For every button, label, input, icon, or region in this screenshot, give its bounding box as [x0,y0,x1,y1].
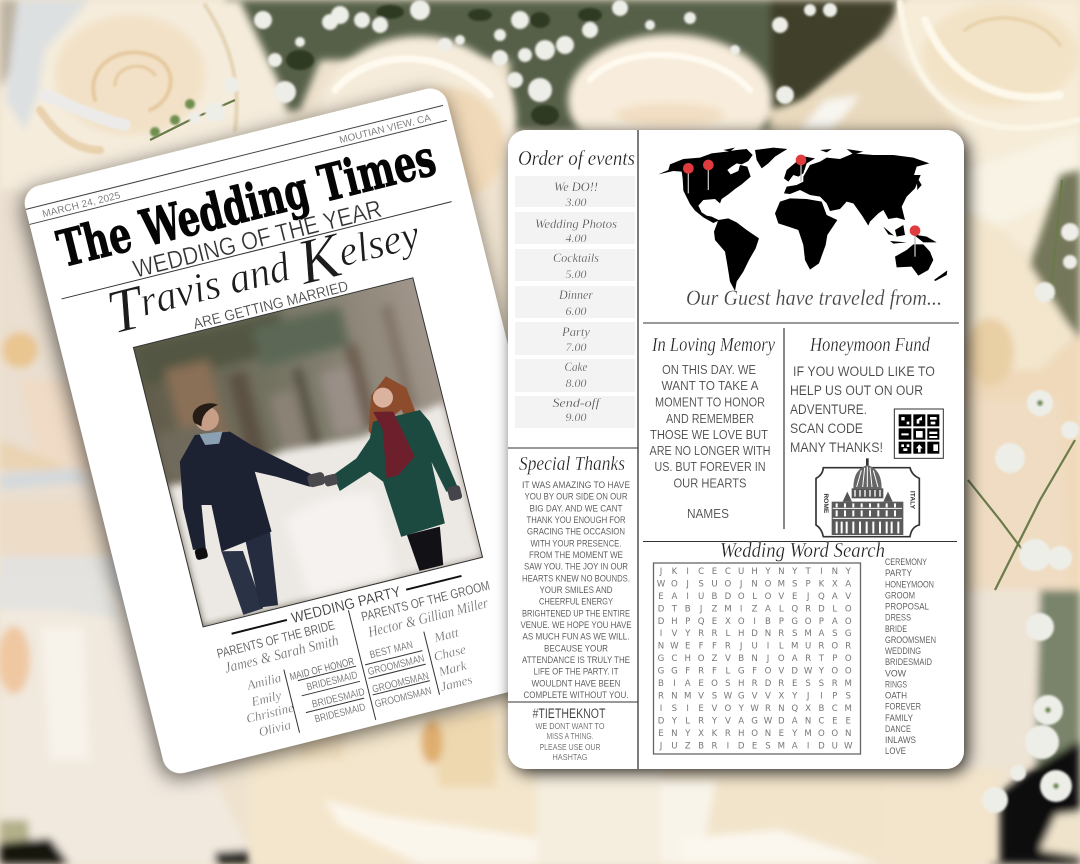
word search grid: BIAEOSHRDRESSRM [658,679,852,689]
panel: special thanks: CHEERFUL ENERGY [539,596,614,607]
panel: world map [658,148,947,310]
panel: special thanks: ATTENDANCE IS TRULY THE [522,654,630,665]
word list: GROOM [885,590,915,601]
icon: Rome postage stamp [816,458,919,537]
groom's side: GROOMSMAN [367,653,426,678]
groom's side: PARENTS OF THE GROOM [360,578,491,624]
panel: in loving memory: OUR HEARTS [674,476,746,490]
word list: HONEYMOON [885,579,934,590]
word list: CEREMONY [885,557,927,568]
bottom center roses [250,695,1000,864]
word list: OATH [885,691,907,702]
panel: special thanks: FROM THE MOMENT WE [529,549,623,560]
man [180,403,325,615]
masthead title: The Wedding Times [52,128,441,279]
word search grid: EAIUBDOLOVEJQAV [658,592,851,602]
panel: special thanks: THANK YOU ENOUGH FOR [526,514,626,525]
word search grid: JUZBRIDESMAIDUW [659,741,853,751]
headline: wedding of the year: WEDDING OF THE YEAR [130,195,385,284]
word search grid: DHPQEXOIBPGOPAO [658,617,852,627]
panel: order of events: 7.00 [566,340,586,354]
panel: honeymoon fund: MANY THANKS! [790,440,883,455]
word list: PROPOSAL [885,602,929,612]
panel: special thanks: Special Thanks [519,453,625,475]
groom's side: James [439,672,474,694]
icon: QR code [894,409,943,458]
word search grid: JKICECUHYNYTINY [659,567,852,577]
panel: order of events: 3.00 [564,195,586,209]
panel: hashtag: WE DONT WANT TO [536,722,604,731]
panel: honeymoon fund: SCAN CODE [790,421,863,436]
panel: in loving memory: WANT TO TAKE A [662,379,759,393]
panel: honeymoon fund [790,334,943,537]
world map silhouette [658,148,947,291]
panel: order of events: 4.00 [566,231,586,245]
panel: special thanks: GRACING THE OCCASION [527,526,625,537]
panel: in loving memory: ARE NO LONGER WITH [650,444,770,458]
icon: Rome postage stamp: ITALY [909,491,916,510]
word list: BRIDE [885,624,907,635]
couple names: ravis and [135,242,305,326]
groom's side: BEST MAN [369,639,414,661]
panel: hashtag [532,706,606,762]
panel: in loving memory: THOSE WE LOVE BUT [650,428,768,442]
panel: in loving memory: ON THIS DAY. WE [662,363,756,377]
word list [885,557,936,757]
word search grid: IVYRRLHDNRSMASG [660,629,852,639]
panel: order of events: Send-off [552,395,602,410]
couple names: elsey [334,212,424,276]
groom's side: Matt [432,624,460,645]
section heading [230,568,464,642]
panel: in loving memory: MOMENT TO HONOR [655,396,765,410]
word list: VOW [885,668,906,679]
panel: order of events: 8.00 [566,376,586,390]
top roses [0,0,1080,250]
word list: LOVE [885,746,906,757]
panel: hashtag: MISS A THING. [546,732,594,741]
panel: special thanks: BRIGHTENED UP THE ENTIRE [522,607,630,618]
bride's side: Emily [249,687,283,709]
left side petals [0,190,135,610]
word list: FOREVER [885,702,921,713]
bride's side: James & Sarah Smith [223,633,340,677]
panel: order of events: 9.00 [566,410,586,424]
panel: order of events: Wedding Photos [535,216,617,231]
word search grid [654,563,860,754]
panel: special thanks: VENUE. WE HOPE YOU HAVE [520,619,632,630]
panel: special thanks: YOU BY OUR SIDE ON OUR [524,491,628,502]
bride's side: BRIDESMAID [311,686,366,711]
right side roses [964,170,1080,864]
bride's side [215,614,371,747]
panel: honeymoon fund: IF YOU WOULD LIKE TO [793,364,935,379]
rose petal folds [40,2,1078,150]
panel: special thanks: BIG DAY. AND WE CANT [530,502,623,513]
groom's side: Chase [432,641,467,664]
word list: WEDDING [885,646,921,657]
bride's side: PARENTS OF THE BRIDE [215,617,337,661]
word search grid: NWEFFRJUILMUROR [658,642,851,652]
couple photo [133,278,483,627]
panel: order of events: Dinner [558,287,594,302]
section heading: WEDDING PARTY [290,583,402,627]
word list: DRESS [885,613,911,624]
panel: special thanks: WOULDNT HAVE BEEN [532,677,620,688]
groom's side: Mark [436,658,468,679]
panel: honeymoon fund: HELP US OUT ON OUR [790,383,923,398]
word list: FAMILY [885,713,914,724]
bride's side: Olivia [257,717,293,739]
panel: in loving memory: US. BUT FOREVER IN [654,460,766,474]
panel: order of events: We DO!! [554,179,598,194]
panel: wedding word search: Wedding Word Search [720,538,885,562]
couple names: T [100,272,154,347]
word search grid: WOJSUOJNOMSPKXA [657,579,851,589]
word list: RINGS [885,679,907,690]
panel: order of events: Order of events [518,146,635,170]
bride's side: BRIDESMAID [313,701,367,725]
panel: in loving memory: In Loving Memory [651,334,775,356]
groom's side: Hector & Gillian Miller [366,596,490,641]
panel: hashtag: PLEASE USE OUR [540,743,601,752]
panel: order of events: Cake [564,359,588,374]
bottom left rose [0,577,250,864]
panel: special thanks: AS MUCH FUN AS WE WILL. [522,631,630,642]
word list: GROOMSMEN [885,635,936,646]
woman [324,376,462,571]
word list: PARTY [885,568,913,579]
panel: order of events: 5.00 [566,267,586,281]
panel: special thanks: BECAUSE YOUR [544,642,608,653]
subheadline: ARE GETTING MARRIED [192,278,350,333]
dateline band [26,105,447,224]
icon: Rome postage stamp: ROME [822,493,829,514]
panel: special thanks: SAW YOU. THE JOY IN OUR [524,561,628,572]
panel: special thanks: WITH YOUR PRESENCE. [530,537,622,548]
bride's side: Amilia [244,670,283,693]
right card: program back [508,130,964,769]
panel: order of events [515,146,635,428]
word search grid: ENYXKRHONEYMOON [658,729,851,739]
bride's side: MAID OF HONOR [288,656,356,683]
left card: wedding newspaper front [21,85,589,777]
groom's side: GROOMSMAN [374,685,433,710]
map pins [683,155,920,257]
word list: INLAWS [885,735,916,746]
panel: special thanks [519,453,632,700]
panel: hashtag: #TIETHEKNOT [532,706,606,721]
panel: special thanks: HEARTS KNEW NO BOUNDS. [522,572,630,583]
word list: DANCE [885,724,911,735]
panel: honeymoon fund: ADVENTURE. [790,402,867,417]
panel: order of events: Cocktails [553,250,599,265]
panel: special thanks: COMPLETE WITHOUT YOU. [524,689,628,700]
dateline band: MARCH 24, 2025 [41,190,122,220]
headline: wedding of the year [56,178,452,302]
word search grid: DTBJZMIZALQRDLO [658,604,852,614]
word search grid: DYLRYVAGWDANCEE [658,716,851,726]
bride's side: BRIDESMAID [305,669,359,693]
bride's side: Christine [245,700,295,726]
panel: order of events: 6.00 [566,304,586,318]
panel: wedding word search [654,538,936,757]
flower foliage [225,0,905,130]
panel: special thanks: IT WAS AMAZING TO HAVE [522,479,630,490]
panel: in loving memory: AND REMEMBER [666,412,754,426]
panel: special thanks: YOUR SMILES AND [540,584,613,595]
dateline band: MOUTIAN VIEW, CA [338,113,432,146]
panel: hashtag: HASHTAG [552,753,588,762]
word list: BRIDESMAID [885,657,932,668]
word search grid: GCHOZVBNJOARTPO [658,654,852,664]
panel: order of events: Party [561,324,590,339]
groom's side: GROOMSMAN [371,670,430,696]
panel: in loving memory [650,334,775,521]
wedding party section [211,562,514,753]
word search grid: GGFRFLGFOVDWYOO [658,667,852,677]
panel: in loving memory: NAMES [687,507,729,521]
couple names: K [289,218,351,298]
baby's breath stems [150,100,1075,590]
panel: special thanks: LIFE OF THE PARTY. IT [534,666,619,677]
panel: honeymoon fund: Honeymoon Fund [809,334,931,356]
word search grid: RNMVSWGVVXYJIPS [658,692,851,702]
map caption: Our Guest have traveled from... [686,285,942,310]
groom's side [352,578,512,710]
word search grid: ISIEVOYWRNQXBCM [660,704,852,714]
